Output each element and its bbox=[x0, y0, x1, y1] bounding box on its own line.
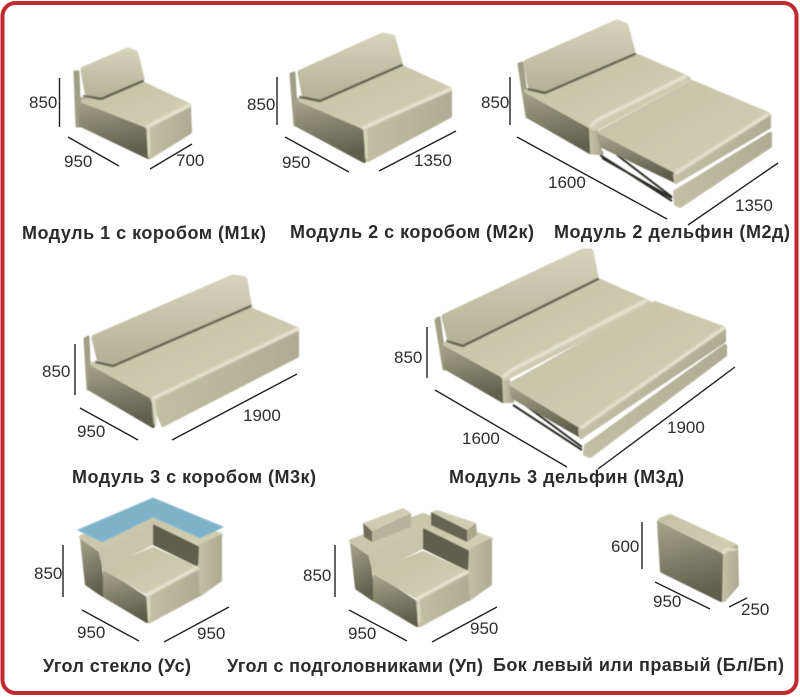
dimension lines bbox=[335, 545, 497, 642]
dimension lines bbox=[75, 344, 297, 440]
dimension labels: 850 bbox=[394, 348, 422, 367]
dimension labels: 1350 bbox=[735, 196, 773, 215]
title: Модуль 3 с коробом (М3к) bbox=[72, 467, 316, 487]
dimension labels: 950 bbox=[282, 153, 310, 172]
panel: side panel bbox=[493, 516, 784, 675]
dimension labels: 850 bbox=[481, 93, 509, 112]
title: Модуль 3 дельфин (М3д) bbox=[449, 467, 684, 487]
dimension labels: 950 bbox=[197, 624, 225, 643]
title: Угол стекло (Ус) bbox=[43, 656, 191, 676]
panel: module 2 dolphin bbox=[481, 23, 790, 242]
dimension labels: 1350 bbox=[414, 151, 452, 170]
title: Модуль 2 с коробом (М2к) bbox=[290, 222, 534, 242]
dimension lines bbox=[60, 78, 192, 169]
dimension labels: 950 bbox=[470, 619, 498, 638]
dimension labels: 850 bbox=[29, 93, 57, 112]
dimension labels: 950 bbox=[653, 592, 681, 611]
mechanism bbox=[513, 405, 582, 450]
dimension labels: 850 bbox=[42, 362, 70, 381]
illustration: module 3 sofa bbox=[85, 278, 298, 426]
dimension labels: 950 bbox=[348, 624, 376, 643]
dimension labels: 850 bbox=[247, 95, 275, 114]
dimension labels: 1900 bbox=[667, 418, 705, 437]
panel: corner with headrests bbox=[227, 508, 498, 676]
dimension labels bbox=[42, 362, 281, 441]
dimension labels bbox=[481, 93, 773, 215]
dimension labels: 600 bbox=[611, 537, 639, 556]
dimension labels: 950 bbox=[77, 623, 105, 642]
title: Угол с подголовниками (Уп) bbox=[227, 656, 483, 676]
illustration: module 2 sofa bbox=[291, 36, 451, 161]
illustration: module 1 sofa bbox=[75, 51, 190, 157]
dimension labels bbox=[611, 537, 769, 619]
dimension labels: 700 bbox=[176, 151, 204, 170]
dimension labels: 1600 bbox=[548, 173, 586, 192]
dimension labels: 950 bbox=[77, 422, 105, 441]
dimension lines bbox=[642, 522, 747, 609]
illustration: corner module with headrests bbox=[351, 508, 491, 625]
dimension labels: 250 bbox=[741, 600, 769, 619]
mechanism bbox=[600, 155, 672, 201]
dimension labels: 950 bbox=[64, 152, 92, 171]
headrests bbox=[363, 508, 477, 542]
illustration: module 2 dolphin sofa bed bbox=[519, 23, 770, 206]
title: Бок левый или правый (Бл/Бп) bbox=[493, 655, 784, 675]
dimension labels bbox=[303, 566, 498, 643]
title: Модуль 1 с коробом (М1к) bbox=[22, 223, 266, 243]
dimension labels bbox=[29, 93, 204, 171]
panel: module 1 with box bbox=[22, 51, 266, 243]
dimension labels: 850 bbox=[34, 564, 62, 583]
panel: corner with glass bbox=[34, 498, 229, 676]
dimension labels: 1900 bbox=[243, 406, 281, 425]
illustration: side block bbox=[659, 516, 737, 600]
panel: module 3 dolphin bbox=[394, 252, 735, 487]
illustration: module 3 dolphin sofa bed bbox=[436, 252, 725, 456]
dimension labels: 1600 bbox=[462, 429, 500, 448]
dimension lines bbox=[277, 77, 456, 172]
dimension labels bbox=[34, 564, 225, 643]
dimension lines bbox=[427, 327, 735, 469]
title: Модуль 2 дельфин (М2д) bbox=[554, 222, 790, 242]
panel: module 2 with box bbox=[247, 36, 534, 242]
dimension labels bbox=[394, 348, 705, 448]
dimension lines bbox=[510, 77, 778, 225]
dimension lines bbox=[63, 545, 229, 642]
dimension labels bbox=[247, 95, 452, 172]
illustration: corner module with glass top bbox=[78, 498, 223, 621]
glass top bbox=[78, 498, 223, 542]
panel: module 3 with box bbox=[42, 278, 316, 487]
dimension labels: 850 bbox=[303, 566, 331, 585]
